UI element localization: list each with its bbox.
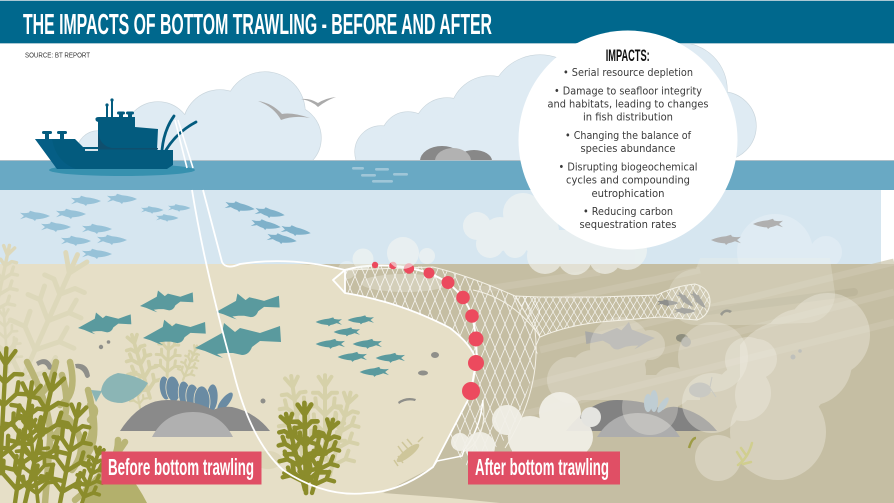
sand mound <box>254 451 282 469</box>
label: after bottom trawling <box>468 452 620 484</box>
birds <box>258 97 336 120</box>
ship <box>35 98 196 176</box>
second school of fish <box>224 200 311 246</box>
after ground <box>0 264 894 503</box>
sky background <box>0 0 894 160</box>
blue mussels after <box>644 390 671 414</box>
grey fish in cloud <box>711 219 783 245</box>
top school of fish <box>20 194 190 259</box>
impacts list: • Disrupting biogeochemical <box>558 160 698 174</box>
title: THE IMPACTS OF BOTTOM TRAWLING - BEFORE AND AFTER <box>23 9 492 41</box>
flatfish <box>91 373 148 403</box>
label: before bottom trawling <box>102 452 262 484</box>
background seaweed light <box>0 240 111 410</box>
mussels <box>158 375 236 416</box>
after seabed creatures <box>584 310 732 448</box>
source note: SOURCE: BT REPORT <box>25 50 90 60</box>
horizon rocks <box>420 146 492 160</box>
trawl net neck <box>515 284 710 337</box>
net lower ropes <box>433 400 483 467</box>
sediment cloud right upper <box>668 258 835 325</box>
red floats <box>372 262 484 400</box>
tow cables <box>175 120 193 168</box>
medium tan coral <box>27 362 125 503</box>
sediment cloud center <box>547 317 748 435</box>
cloud behind ship <box>78 71 322 160</box>
bright sediment puffs <box>682 337 777 433</box>
impacts heading: IMPACTS: <box>606 47 650 65</box>
seabed rock after <box>566 400 717 437</box>
net bag outline <box>192 190 476 494</box>
underwater background <box>0 190 881 264</box>
impacts list: • Damage to seafloor integrity <box>554 84 702 98</box>
sediment puffs at net mouth <box>352 237 435 270</box>
header bar <box>0 0 894 44</box>
white sediment clouds lower <box>451 392 593 462</box>
impacts list <box>548 66 709 231</box>
tiny crustaceans <box>36 340 439 404</box>
net seam lines <box>345 267 536 452</box>
impacts list: • Changing the balance of <box>565 129 692 142</box>
catch inside cod end <box>657 289 708 315</box>
impacts list: species abundance <box>580 142 676 155</box>
float rope <box>345 265 476 391</box>
impacts list: cycles and compounding <box>566 174 690 186</box>
creatures in sediment <box>689 349 802 465</box>
seabed mound <box>80 470 147 503</box>
distant cloud under water right <box>737 214 842 290</box>
impacts list: • Serial resource depletion <box>563 66 693 79</box>
cloud behind impacts circle <box>354 44 757 160</box>
impacts list: and habitats, leading to changes <box>548 98 709 110</box>
sea surface band <box>0 160 894 190</box>
upper sediment clouds at water line <box>463 193 647 275</box>
isopod <box>394 437 423 466</box>
impacts circle <box>518 30 738 250</box>
impacts list: eutrophication <box>592 187 665 200</box>
label: before bottom trawling: Before bottom trawling <box>108 454 254 480</box>
dust cloud at net mouth <box>338 261 449 292</box>
mid seaweed light <box>117 324 370 480</box>
label: after bottom trawling: After bottom trawling <box>475 454 609 480</box>
impacts list: in fish distribution <box>583 110 673 124</box>
waves <box>352 167 408 183</box>
impacts list: • Reducing carbon <box>583 205 673 218</box>
trawl net mesh body <box>340 266 540 470</box>
impacts list: sequestration rates <box>580 218 677 231</box>
before ground with net bag <box>0 264 500 503</box>
dust streaks <box>480 262 894 415</box>
trawl arms <box>162 116 196 150</box>
foreground dark seaweed center <box>268 403 350 498</box>
small teal fish school <box>316 315 405 377</box>
hull and cabin <box>35 117 173 169</box>
deck fittings <box>42 98 134 140</box>
foreground dark seaweed left <box>0 347 113 503</box>
big cod fish <box>78 290 281 358</box>
seabed rock before <box>120 400 270 437</box>
sediment cloud right lower <box>695 293 870 481</box>
ship shadow <box>49 164 195 176</box>
